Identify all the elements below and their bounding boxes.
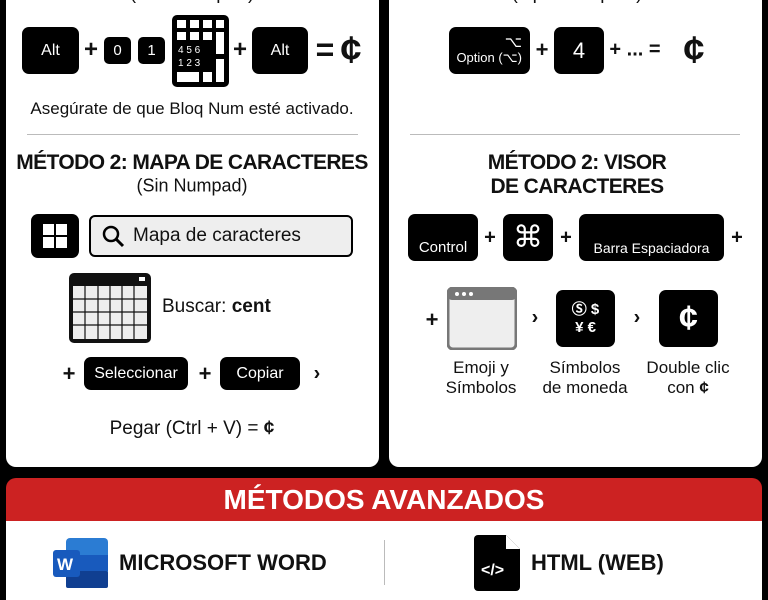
text: Buscar: cent — [162, 296, 271, 317]
search box: Mapa de caracteres — [133, 225, 301, 246]
option row: + ... = — [609, 38, 661, 60]
header: metodos avanzados: MÉTODOS AVANZADOS — [224, 484, 544, 514]
shortcut row mac: + — [731, 226, 743, 248]
option row: + — [536, 37, 548, 62]
icon: numpad: 4 5 6 — [178, 45, 201, 56]
icon: window — [447, 287, 517, 350]
viewer steps: Double clic — [646, 358, 730, 377]
icon: numpad: 1 2 3 — [178, 58, 201, 69]
icon: currency: Ⓢ $ — [572, 300, 599, 318]
alt code row: + — [84, 36, 98, 63]
select copy row — [63, 357, 320, 390]
text: HTML (WEB) — [531, 550, 664, 575]
alt code row — [22, 15, 362, 87]
shortcut row mac: ⌘ — [513, 221, 543, 254]
select copy row: Seleccionar — [94, 364, 178, 382]
option row: 4 — [573, 38, 585, 62]
option row — [449, 27, 705, 74]
alt code row: Alt — [41, 42, 60, 58]
option row: ¢ — [683, 30, 705, 72]
icon: windows key — [31, 214, 79, 258]
viewer steps: + — [426, 307, 438, 332]
search box — [89, 215, 353, 257]
icon: word — [53, 538, 108, 588]
alt code row: 0 — [113, 42, 122, 59]
icon: html file — [474, 535, 520, 591]
icon: word: W — [57, 555, 74, 574]
viewer steps: Emoji y — [453, 358, 509, 377]
select copy row: Copiar — [236, 364, 284, 382]
alt code row: = — [316, 32, 334, 68]
note: Asegúrate de que Bloq Num esté activado. — [30, 99, 354, 118]
heading: metodo 2 windows: MÉTODO 2: MAPA DE CARACTERES — [16, 151, 368, 174]
viewer steps: de moneda — [542, 378, 628, 397]
select copy row: + — [199, 361, 211, 386]
header: metodos avanzados — [6, 478, 762, 521]
option row: ⌥ — [505, 34, 522, 50]
option row: Option (⌥) — [456, 50, 522, 64]
heading: metodo 2 mac — [488, 150, 666, 198]
viewer steps — [426, 287, 730, 397]
panel: mac — [389, 0, 762, 467]
viewer steps: con ¢ — [667, 378, 709, 397]
select copy row: › — [314, 362, 320, 384]
viewer steps: Símbolos — [446, 378, 516, 397]
heading: metodo 2 mac: DE CARACTERES — [490, 175, 664, 198]
icon: cent key — [659, 290, 718, 347]
text: (Sin Numpad) — [136, 176, 248, 196]
shortcut row mac: Barra Espaciadora — [594, 240, 709, 256]
icon: numpad — [172, 15, 229, 87]
alt code row: 1 — [147, 42, 156, 59]
icon: html file: </> — [481, 562, 504, 579]
alt code row: + — [233, 36, 247, 63]
panel: windows — [6, 0, 379, 467]
paste: Pegar (Ctrl + V) = ¢ — [110, 418, 274, 439]
icon: cent key: ¢ — [679, 299, 698, 337]
shortcut row mac: Control — [419, 239, 467, 256]
heading: metodo 2 mac: MÉTODO 2: VISOR — [488, 151, 666, 174]
alt code row: ¢ — [340, 30, 362, 72]
icon: character map — [69, 273, 151, 343]
text: MICROSOFT WORD — [119, 550, 327, 575]
icon: currency — [556, 290, 615, 347]
shortcut row mac: + — [560, 226, 572, 248]
shortcut row mac — [408, 214, 743, 261]
viewer steps: › — [634, 306, 640, 328]
select copy row: + — [63, 361, 75, 386]
viewer steps: Símbolos — [550, 358, 620, 377]
viewer steps: › — [532, 306, 538, 328]
panel: advanced — [6, 521, 762, 600]
alt code row: Alt — [271, 42, 289, 58]
icon: currency: ¥ € — [575, 318, 596, 336]
shortcut row mac: + — [484, 226, 496, 248]
